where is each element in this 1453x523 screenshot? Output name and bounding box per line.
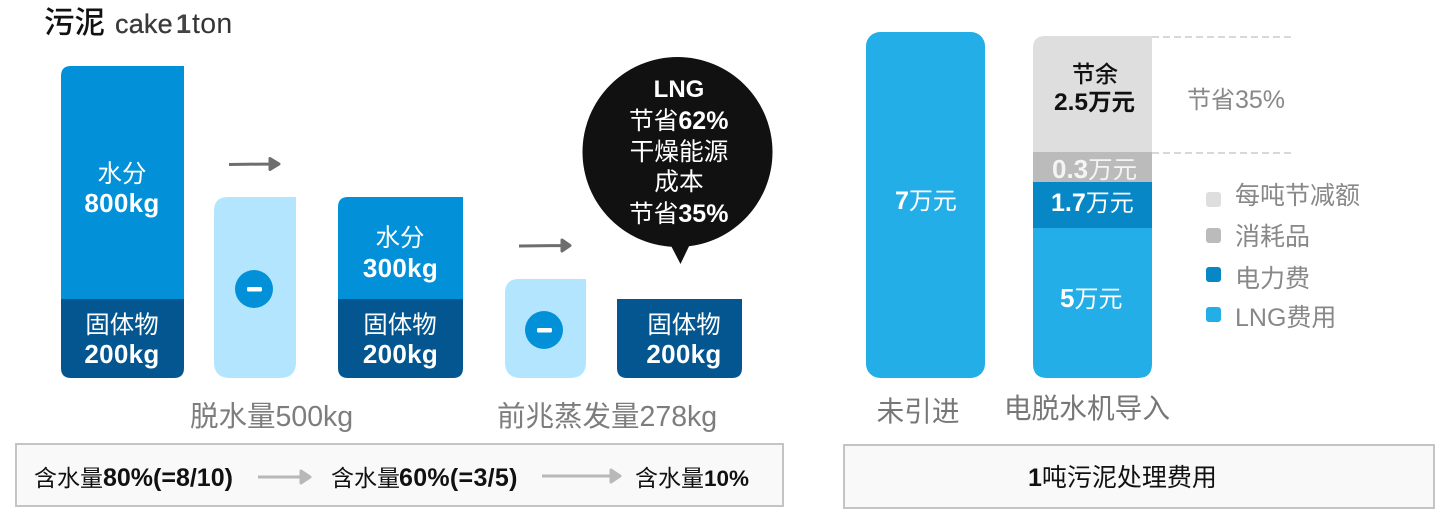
cost caption box: 1吨污泥处理费用 [1028, 464, 1217, 492]
bar: initial sludge: 水分 [98, 160, 146, 188]
bar: initial sludge [61, 66, 184, 378]
callout: savings [582, 57, 772, 264]
moisture content box [16, 444, 783, 506]
bar: after dewatering: 300kg [363, 253, 438, 283]
moisture content box: 含水量10% [635, 465, 749, 491]
bar: final solids: 固体物 [647, 311, 721, 339]
bar: without equipment: 7万元 [895, 187, 957, 215]
bar: after dewatering: 固体物 [363, 311, 437, 339]
legend [1206, 182, 1360, 332]
arrow: evaporation [519, 240, 570, 251]
removed water: evaporation [505, 279, 586, 378]
label: dewatering amount: 脱水量500kg [190, 401, 353, 433]
stacked bar: with dewatering machine: 2.5万元 [1054, 89, 1135, 116]
bar: after dewatering: 水分 [376, 224, 424, 252]
arrow: dewatering [229, 158, 279, 170]
removed water: dewatering [214, 197, 296, 378]
bar: final solids [617, 299, 742, 378]
stacked bar: with dewatering machine: 1.7万元 [1051, 189, 1134, 217]
bar: initial sludge: 固体物 [85, 311, 159, 339]
callout: savings: 节省62% [629, 107, 728, 135]
legend: LNG费用 [1235, 304, 1336, 332]
bar: after dewatering: 200kg [363, 339, 438, 369]
callout: savings: 节省35% [629, 200, 728, 228]
title: ton [192, 8, 233, 40]
label: evaporation amount: 前兆蒸发量278kg [497, 401, 717, 433]
bar: final solids: 200kg [646, 339, 722, 369]
legend: 电力费 [1235, 265, 1310, 293]
legend: 每吨节减额 [1235, 182, 1360, 210]
title [44, 6, 233, 40]
savings bracket lines [1152, 37, 1291, 153]
title: 1 [176, 9, 191, 39]
label: without equipment: 未引进 [876, 396, 960, 427]
callout: savings: LNG [654, 76, 704, 103]
callout: savings: 成本 [654, 168, 704, 196]
bar: after dewatering [338, 197, 463, 378]
label: with dewatering machine: 电脱水机导入 [1004, 393, 1170, 424]
cost caption box [844, 445, 1434, 508]
moisture content box: 含水量60%(=3/5) [331, 464, 518, 492]
stacked bar: with dewatering machine: 5万元 [1060, 283, 1122, 313]
stacked bar: with dewatering machine: 0.3万元 [1052, 154, 1137, 184]
title: 污泥 [44, 6, 105, 40]
callout: savings: 干燥能源 [630, 138, 728, 166]
moisture content box: 含水量80%(=8/10) [34, 464, 233, 492]
bar: without equipment [866, 32, 985, 378]
title: cake [115, 9, 173, 39]
bar: initial sludge: 800kg [84, 188, 160, 218]
bar: initial sludge: 200kg [84, 339, 160, 369]
legend: 消耗品 [1235, 223, 1310, 251]
stacked bar: with dewatering machine: 节余 [1072, 61, 1118, 87]
stacked bar: with dewatering machine [1033, 36, 1152, 378]
label: savings percentage: 节省35% [1187, 86, 1285, 114]
